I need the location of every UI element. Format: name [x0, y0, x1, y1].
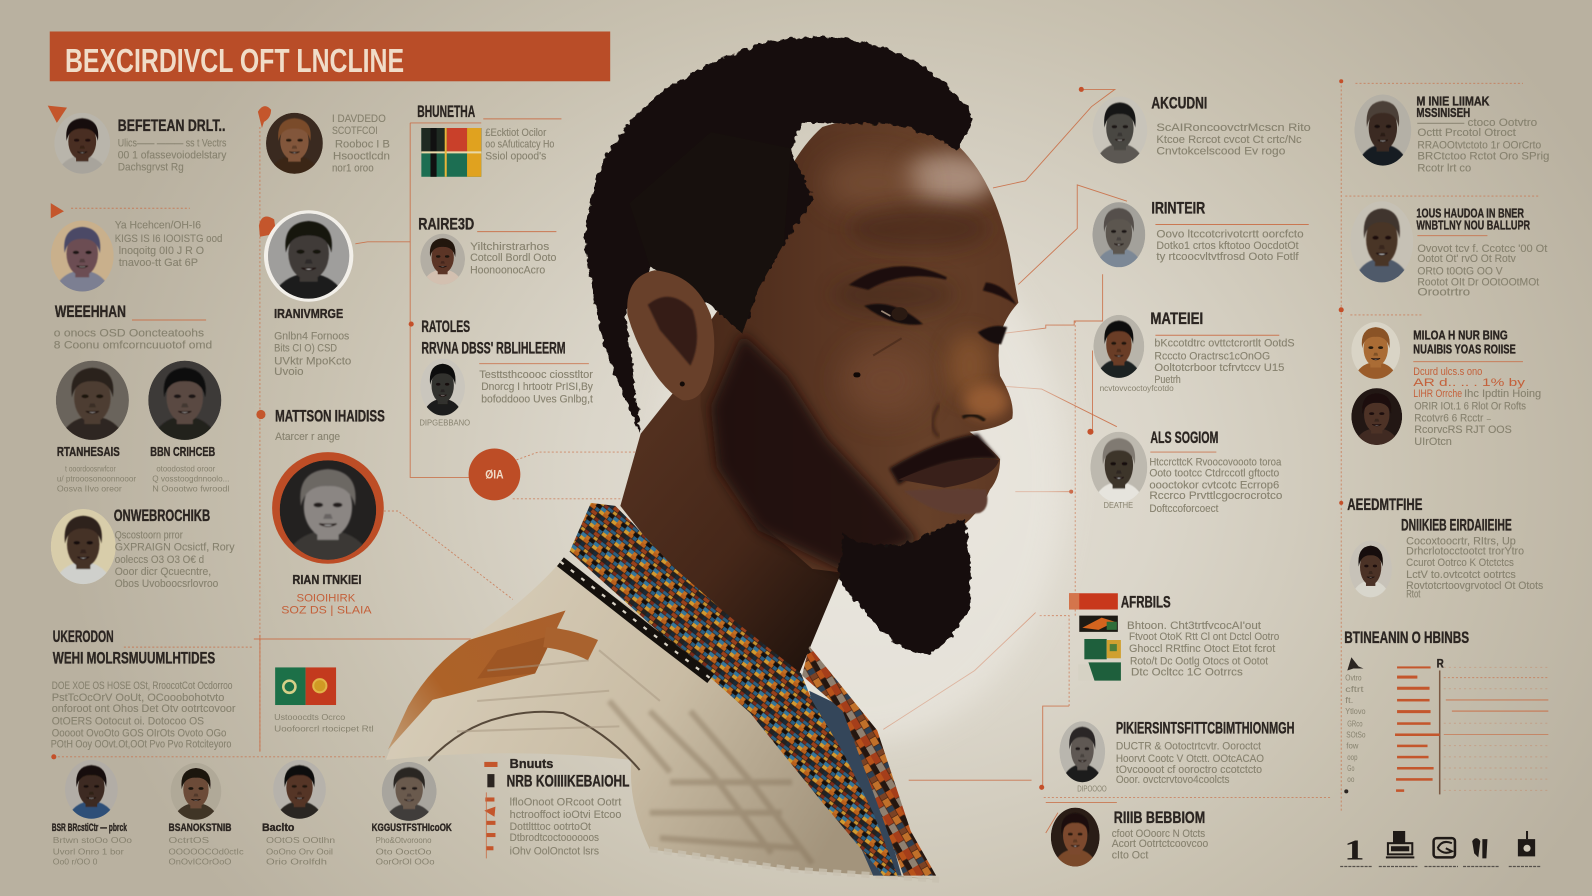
caption: Uoofoorcrl rtocicpet Rtl — [274, 723, 374, 733]
text block: DUCTR & Ootoctrtcvtr. Ooroctct — [1116, 741, 1261, 753]
heading: RIIIB BEBBIOM — [1114, 809, 1205, 827]
text block: oo sAfuticatcy Ho — [485, 138, 554, 150]
text block: Dtbrodtcoctoooooos — [510, 832, 599, 844]
text block: Ovovot tcv f. Ccotcc '00 Ot — [1417, 243, 1547, 255]
callout circle: ØIA — [485, 467, 504, 481]
panel: flags list — [1069, 593, 1279, 681]
portrait — [1092, 202, 1145, 270]
panel: bar chart — [1344, 629, 1548, 794]
text block: Rtot — [1406, 588, 1420, 600]
text block: OorOrOl OOo — [376, 857, 435, 867]
portrait — [420, 234, 465, 287]
text block: bKccotdtrc ovttctcrortlt OotdS — [1154, 337, 1295, 349]
text block: Hoorvt Cootc V Otctt. OOtcACAO — [1116, 753, 1264, 765]
text block: Oovo ltccotcrivotcrtt oorcfcto — [1156, 229, 1304, 241]
heading: WNBTLNY NOU BALLUPR — [1416, 218, 1530, 233]
text block: Ooto tootcc Ctdrccotl gftocto — [1149, 467, 1279, 479]
text block: LctV to.ovtcotct ootrtcs — [1406, 569, 1516, 581]
text block: Yiltchirstrarhos — [470, 241, 549, 253]
heading: MILOA H NUR BING — [1413, 327, 1508, 342]
text block: o onocs OSD Ooncteatoohs — [54, 327, 204, 339]
portrait — [266, 212, 351, 300]
panel: right list item one — [1092, 95, 1311, 167]
marker — [256, 410, 266, 419]
text block — [1417, 117, 1549, 175]
text block: Rcotvr6 6 Rcctr ₋ — [1414, 413, 1492, 425]
ear — [627, 270, 714, 400]
panel: featured portrait orange ring — [256, 408, 385, 617]
caption: DIPOOOO — [1077, 783, 1107, 793]
panel: lower left text — [51, 628, 236, 751]
text block: hctrooffoct ioOtvi Etcoo — [510, 809, 621, 821]
central portrait of man — [386, 37, 1066, 880]
eyes and brows — [852, 268, 1016, 421]
text block: £Ecktiot Ocilor — [485, 127, 547, 139]
icon captions — [1340, 866, 1540, 868]
text block: cIto Oct — [1112, 849, 1148, 861]
text block: Gnlbn4 Fornoos — [274, 330, 349, 342]
text block: Bits CI O) CSD — [274, 342, 337, 354]
text block: Ktcoe Rcrcot cvcot Ct crtc/Nc — [1156, 134, 1302, 146]
text block: otoodostod oroor — [156, 463, 215, 473]
text block: Ooor dicr Qcuecntre, — [115, 566, 211, 578]
heading: NUAIBIS YOAS ROIISE — [1413, 342, 1516, 357]
text block — [1417, 243, 1547, 299]
text block: Rootot OIt Dr OOtOOtMOt — [1417, 276, 1539, 288]
portrait — [1093, 315, 1144, 381]
portrait — [273, 760, 326, 822]
heading: MSSINISEH — [1416, 105, 1470, 120]
text block: Rcotr lrt co — [1417, 163, 1471, 175]
heading: AKCUDNI — [1151, 95, 1207, 113]
portrait — [51, 220, 114, 295]
text block: 8 Coonu omfcorncuuotof omd — [54, 339, 212, 351]
text block: cfoot OOoorc N Otcts — [1112, 828, 1205, 840]
text block: Ccurot Ootrco K Otctctcs — [1406, 557, 1514, 569]
text block: POtH Ooy OOvt.Ot,OOt Pvo Pvo Rotciteyoro — [51, 739, 232, 751]
text block: Oo0 r/OO 0 — [53, 857, 98, 867]
orange text: Dcurd ulcs.s ono — [1413, 366, 1482, 378]
text block: Bhtoon. Cht3trtfvcocAI'out — [1127, 620, 1261, 632]
portrait face — [268, 213, 349, 303]
name: BSANOKSTNIB — [169, 822, 231, 834]
text block: Puetrh — [1154, 374, 1181, 386]
mouth and beard — [839, 434, 999, 655]
text block: Orio Orolfdh — [266, 857, 327, 867]
text block: ty rtcoocvltvtfrosd Ooto Fotlf — [1156, 251, 1299, 263]
panel: right lower item — [1059, 719, 1295, 793]
text block: Testtsthcoooc ciosstltor — [479, 369, 593, 381]
panel: second portrait — [258, 106, 390, 177]
text block: Doftccoforcoect — [1149, 503, 1218, 515]
bars — [1395, 666, 1440, 792]
text block: tOvcoooot cf ooroctro ccotctcto — [1116, 764, 1262, 776]
text block: OctrtOS — [169, 835, 209, 845]
text block — [1149, 456, 1282, 515]
text block: KIGS IS I6 IOOISTG ood — [115, 233, 222, 245]
heading: MATTSON IHAIDISS — [275, 408, 385, 426]
text block: PstTcOcOrV OoUt, OCooobohotvto — [52, 692, 224, 704]
connector lines — [51, 79, 1540, 813]
portrait — [1351, 322, 1400, 382]
text block: OOtOS OOtlhn — [266, 835, 335, 845]
panel: right list item two — [1092, 199, 1309, 270]
orange text: LIHR Orrche — [1413, 388, 1462, 400]
text block: GXPRAIGN Ocsictf, Rory — [115, 542, 235, 554]
panel: two portraits — [56, 361, 230, 494]
text block: UVktr MpoKcto — [274, 356, 351, 368]
text block: Brtwn stoOo OOo — [53, 835, 132, 845]
text block: ORtO t0OtG OO V — [1417, 265, 1504, 277]
right series lines — [1444, 667, 1548, 790]
chart icon and labels: Ytlovo — [1345, 706, 1366, 716]
text block: Ooooot OvoOto GOS OIrOts Ovoto OGo — [52, 728, 226, 740]
axis label: R — [1437, 656, 1444, 670]
text block: OoOno Orv Ooil — [266, 846, 333, 856]
portrait — [1090, 432, 1147, 506]
portrait — [1051, 808, 1100, 869]
icon: monitor with figure — [1386, 831, 1414, 858]
chart icon and labels — [1344, 657, 1366, 793]
subheading: DNIIKIEB EIRDAIIEIHE — [1401, 516, 1512, 534]
text block: iOhv OolOnctot lsrs — [510, 845, 599, 857]
portrait — [171, 763, 221, 823]
text block: Ghoccl RRtfinc Otoct Etot fcrot — [1129, 643, 1275, 655]
orange text — [1413, 366, 1526, 400]
text block: Rovtotcrtoovgrvotocl Ot Otots — [1406, 580, 1543, 592]
portrait ring — [272, 452, 384, 564]
panel: left item three — [51, 507, 235, 590]
text block: nor1 oroo — [332, 163, 374, 175]
text block — [510, 797, 621, 857]
text block: I DAVDEDO — [332, 113, 386, 125]
name: RTANHESAIS — [57, 444, 120, 459]
markers — [484, 762, 498, 850]
portrait — [1351, 388, 1402, 448]
neck — [620, 345, 863, 679]
heading: AEEDMTFIHE — [1347, 496, 1423, 514]
heading: MATEIEI — [1150, 310, 1203, 328]
chart icon and labels: Ovtro — [1345, 673, 1362, 683]
chart icon and labels: GRco — [1347, 718, 1363, 728]
text block — [115, 529, 235, 590]
text block: Rccrco Prvttlcgocrocrotco — [1149, 490, 1282, 502]
caption: DIPGEBBANO — [419, 418, 470, 428]
heading line two: RRVNA DBSS' RBLIHLEERM — [421, 340, 566, 358]
panel: green red flag — [274, 667, 374, 733]
text block: OOOOOCOd0ctIc — [169, 846, 244, 856]
icon: framed emblem — [1434, 838, 1455, 857]
portrait — [1349, 540, 1392, 600]
text block: Octtt Prcotol Otroct — [1417, 127, 1516, 139]
panel: right list item three — [1093, 310, 1295, 393]
heading: BEFETEAN DRLT.. — [118, 117, 225, 135]
heading: IRINTEIR — [1151, 199, 1205, 217]
text block: Cotcoll Bordl Ooto — [470, 252, 556, 264]
heading line two: NRB KOIIIIKEBAIOHL — [507, 772, 630, 790]
chart icon and labels: oop — [1347, 752, 1358, 762]
panel: text over shirt — [484, 756, 630, 858]
text block: OnOvICOrOoO — [169, 857, 232, 867]
text block: SCOTFCOI — [332, 125, 378, 137]
icon: camera — [1518, 831, 1535, 856]
caption: Ustooocdts Ocrco — [274, 712, 345, 722]
text block: lnoqoitg 0I0 J R O — [119, 245, 204, 257]
heading: 1OUS HAUDOA IN BNER — [1416, 205, 1524, 220]
text block: HtccrcttcK Rvoocovoooto toroa — [1149, 456, 1281, 468]
heading: BHUNETHA — [417, 103, 475, 121]
text block: Cocoxtoocrtr, RItrs, Up — [1406, 536, 1516, 548]
orange caption: SOZ DS | SLAIA — [281, 605, 373, 617]
text block — [332, 113, 390, 175]
number one: 1 — [1344, 835, 1365, 866]
heading: WEEEHHAN — [55, 303, 126, 321]
orange caption: SOIOIHIRK — [296, 592, 355, 604]
panel: right bottom item — [1046, 803, 1208, 869]
portrait — [54, 113, 110, 177]
chart icon and labels: fow — [1346, 741, 1359, 751]
text block: Ulics—— ——— ss t Vectrs — [118, 137, 226, 149]
orange caption — [281, 592, 373, 617]
text block — [1414, 388, 1541, 448]
heading: RAIRE3D — [418, 216, 474, 234]
collar — [560, 503, 936, 876]
text block: DOE XOE OS HOSE OSt, RroocotCot Ocdorroo — [52, 680, 233, 692]
text block — [1112, 828, 1208, 861]
portrait — [51, 509, 116, 588]
text block: bofoddooo Uves Gnlbg,t — [481, 393, 593, 405]
text block: Ooor. ovctcrvtovo4coolcts — [1116, 774, 1230, 786]
text block: tnavoo-tt Gat 6P — [119, 257, 198, 269]
text block — [54, 327, 212, 351]
text block — [1156, 229, 1304, 263]
text block: Qscostoorn prror — [115, 529, 183, 541]
panel: far right item one — [1354, 94, 1549, 175]
text block — [115, 220, 222, 269]
text block: UIrOtcn — [1414, 436, 1452, 448]
heading: AFRBILS — [1121, 593, 1171, 611]
portrait — [1354, 94, 1411, 169]
text block: Roto/t Dc Ootlg Otocs ot Ootot — [1130, 655, 1268, 667]
chart icon and labels: oo — [1347, 774, 1355, 784]
text block: Dottltttoc ootrtoOt — [510, 821, 591, 833]
panel: far right item four — [1347, 496, 1543, 600]
text block: Drhcrlotocctootct trorYtro — [1406, 546, 1524, 558]
text block: Dnorcg I hrtootr PrISI,By — [481, 381, 594, 393]
marker — [409, 322, 414, 327]
name: Baclto — [262, 822, 295, 834]
text block: Ya Hcehcen/OH-I6 — [115, 220, 201, 232]
heading: PIKIERSINTSFITTCBIMTHIONMGH — [1116, 719, 1295, 737]
heading: ONWEBROCHIKB — [114, 507, 210, 525]
portrait — [382, 762, 437, 824]
text block: lfloOnoot ORcoot Ootrt — [510, 797, 621, 809]
panel: item with black and white portrait — [409, 318, 594, 428]
text block: ScAIRoncoovctrMcscn Rito — [1156, 122, 1311, 134]
text block — [470, 241, 556, 276]
text block — [479, 369, 594, 405]
panel: item with small portrait — [418, 216, 556, 287]
icon: figure — [1472, 838, 1487, 858]
text block — [1406, 536, 1543, 600]
text block — [485, 127, 554, 162]
text block — [1156, 122, 1311, 157]
shirt — [386, 562, 939, 880]
text block — [1127, 620, 1279, 679]
text block: HoonoonocAcro — [470, 264, 545, 276]
text block: Acort Ootrtctcoovcoo — [1112, 838, 1208, 850]
text block: Ftvoot OtoK Rtt Cl ont Dctcl Ootro — [1129, 631, 1279, 643]
portrait — [1059, 721, 1105, 785]
name: KGGUSTFSTHIcoOK — [372, 822, 452, 834]
heading: Bnuuts — [510, 756, 553, 771]
text block — [57, 463, 230, 494]
caption: ncvtovvcoctoyfcotdo — [1100, 383, 1174, 393]
face — [701, 120, 1018, 579]
marker — [48, 106, 67, 123]
panel: flag block — [417, 103, 561, 177]
panel: left column top — [48, 106, 227, 177]
text block: Dachsgrvst Rg — [118, 162, 184, 174]
heading: M INIE LIIMAK — [1416, 94, 1490, 109]
text block: Ssiol opood's — [485, 150, 546, 162]
caption: DEATHE — [1104, 500, 1133, 510]
heading — [1413, 327, 1516, 357]
text block — [1154, 337, 1295, 386]
chart icon and labels: Go — [1347, 763, 1355, 773]
panel: bottom icons — [1340, 831, 1540, 867]
text block: Q vosstoogdnnoolo... — [152, 474, 229, 484]
text block: ooleccs O3 O3 O€ d — [115, 554, 204, 566]
text block: Ihc Ipdtin Hoing — [1464, 388, 1541, 400]
text block: Rcccto Oractrsc1cOnOG — [1154, 351, 1270, 363]
marker — [259, 216, 276, 237]
text block: Dtc Ocltcc 1C Ootrrcs — [1131, 667, 1243, 679]
flag — [421, 128, 481, 177]
name: RIAN ITNKIEI — [292, 572, 361, 587]
panel: left item two — [51, 203, 222, 351]
name: BSR BRcstiCtr — pbrck — [52, 822, 127, 834]
text block: Hsooctlcdn — [333, 150, 390, 162]
text block: OtOERS Ootocut oi. Dotocoo OS — [52, 715, 204, 727]
text block: ORIR IOt.1 6 Rlot Or Rofts — [1414, 400, 1526, 412]
text block — [118, 137, 227, 174]
stubble — [711, 333, 919, 571]
text block — [274, 330, 351, 378]
heading: UKERODON — [53, 628, 114, 646]
marker — [258, 106, 271, 128]
portrait — [1350, 201, 1413, 286]
portrait — [420, 359, 465, 418]
portrait — [280, 460, 376, 565]
text block: RRAOOtvtctoto 1r OOrCrto — [1417, 139, 1541, 151]
text block: Ooltotcrboor tcfrvtccv U15 — [1154, 362, 1284, 374]
flags — [1069, 593, 1121, 681]
heading — [1416, 94, 1490, 120]
text block — [1116, 741, 1264, 786]
chart icon and labels: ft. — [1345, 695, 1353, 705]
marker — [51, 203, 64, 218]
text block: Oto OoctOo — [376, 846, 432, 856]
chart icon and labels: SOtSo — [1346, 730, 1366, 740]
text block: 00 1 ofassevoiodelstary — [118, 149, 227, 161]
portrait — [266, 113, 323, 177]
text block: RcorvcRS RJT OOS — [1414, 424, 1512, 436]
text block: Pho&Otvoroono — [376, 835, 432, 845]
subheading: Atarcer r ange — [275, 431, 340, 443]
text block: oooctokor cvtcotc Ecrrop6 — [1149, 480, 1279, 492]
text block: Oosva IIvo oreor — [57, 484, 122, 494]
heading: BTINEANIN O HBINBS — [1344, 629, 1469, 647]
panel: far right item three — [1351, 322, 1541, 448]
text block: Cnvtokcelscood Ev rogo — [1156, 145, 1285, 157]
orange text: AR d.. .. . 1% by — [1413, 377, 1526, 389]
inner blue shirt — [809, 691, 902, 876]
hair — [585, 37, 973, 434]
portrait — [148, 361, 221, 444]
text block: ———— ctoco Ootvtro — [1417, 117, 1537, 129]
name: IRANIVMRGE — [274, 306, 343, 321]
panel: right list item four — [1090, 429, 1282, 515]
heading: ALS SOGIOM — [1150, 429, 1218, 447]
portrait — [65, 760, 118, 822]
caption — [274, 712, 374, 733]
callout circle — [469, 449, 520, 500]
text block: Uvoio — [274, 366, 304, 378]
text block: Orootrtro — [1417, 287, 1470, 299]
text block: N Ooootwo fwroodl — [152, 484, 230, 494]
title banner: BEXCIRDIVCL OFT LNCLINE — [65, 43, 404, 80]
chart icon and labels: cftrt — [1345, 684, 1364, 694]
text block: BRCtctoo Rctot Oro SPrig — [1417, 150, 1549, 162]
heading: RATOLES — [421, 318, 470, 336]
text block: Uvorl Onro 1 bor — [53, 846, 124, 856]
text block — [53, 835, 435, 867]
heading line two: WEHI MOLRSMUUMLHTIDES — [53, 649, 215, 667]
text block — [51, 680, 236, 751]
name: BBN CRIHCEB — [150, 444, 215, 459]
panel: featured portrait white ring — [259, 212, 351, 378]
text block: Ootot Ot' rvO Ot Rotv — [1417, 253, 1517, 265]
text block: onforoot ont Ohos Det Otv ootrtcovoor — [52, 703, 236, 715]
panel: far right item two — [1350, 201, 1547, 299]
title banner — [50, 31, 610, 81]
text block: Obos Uvoboocsrlovroo — [115, 578, 218, 590]
portrait — [1092, 97, 1147, 167]
panel: bottom row of portraits — [52, 760, 452, 867]
text block: Dotko1 crtos kftotoo OocdotOt — [1156, 240, 1299, 252]
text block: u/ ptrooosonoonnooor — [57, 474, 136, 484]
text block: t ooordoosrwfcor — [65, 463, 116, 473]
flag — [275, 667, 336, 705]
portrait — [56, 361, 129, 444]
text block: Rooboc I B — [335, 138, 390, 150]
heading — [1416, 205, 1530, 233]
